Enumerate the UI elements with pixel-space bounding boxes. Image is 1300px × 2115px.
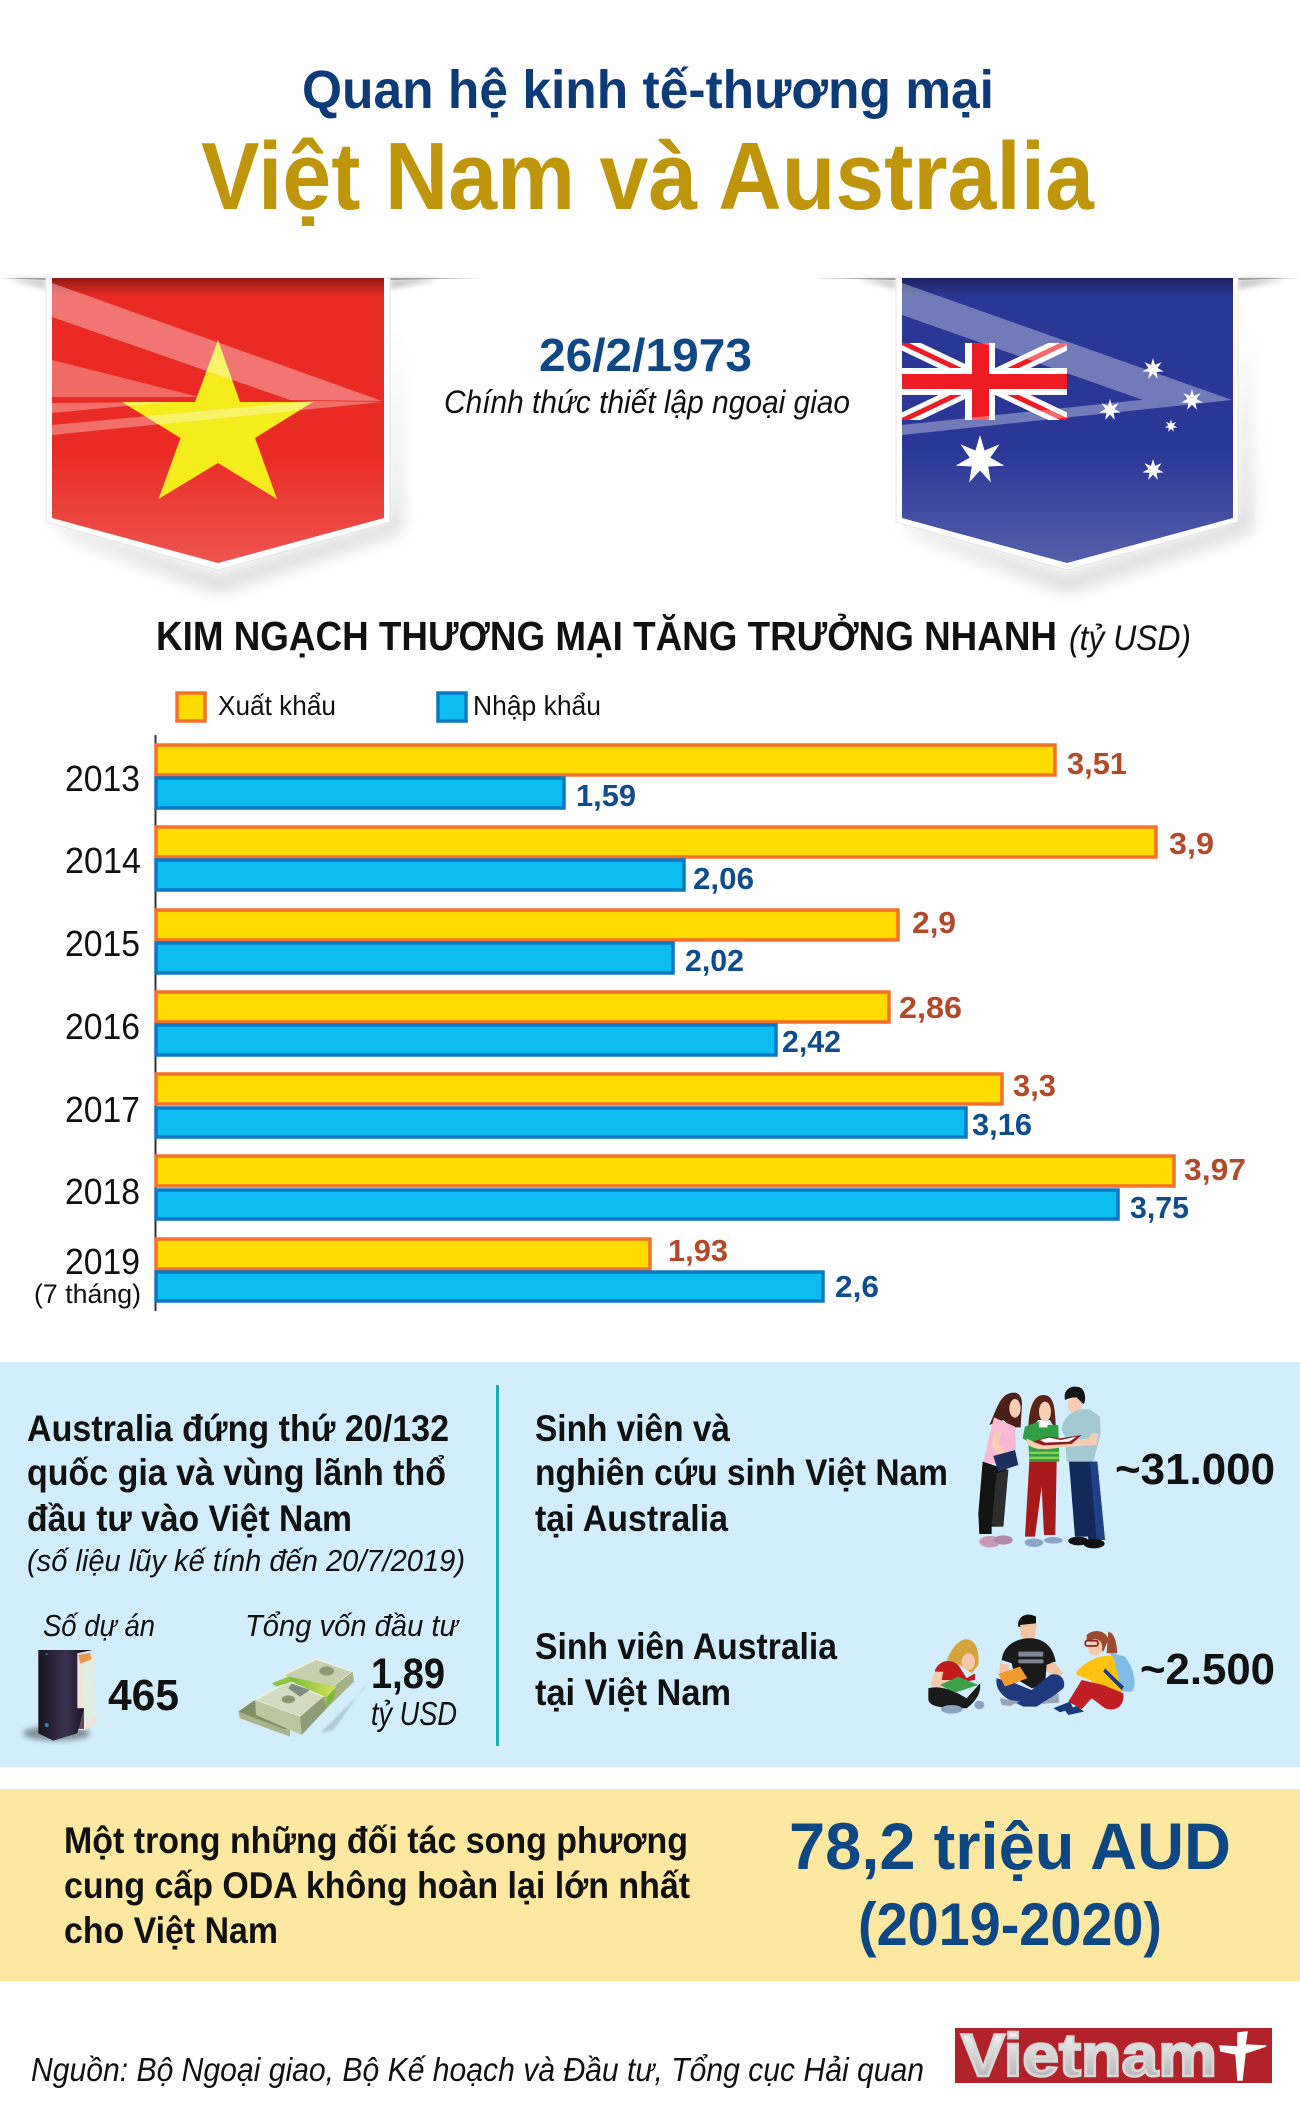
bars 2013: 1,59 xyxy=(576,778,636,813)
date callout xyxy=(444,329,850,420)
bars 2016: 2,42 xyxy=(782,1024,841,1059)
legend: Nhập khẩu xyxy=(473,690,601,721)
chart heading: KIM NGẠCH THƯƠNG MẠI TĂNG TRƯỞNG NHANH xyxy=(156,613,1057,659)
title: Quan hệ kinh tế-thương mại xyxy=(302,60,994,120)
icon: server with folders xyxy=(23,1650,97,1741)
title: Việt Nam và Australia xyxy=(201,123,1095,230)
stat: total capital: tỷ USD xyxy=(371,1695,457,1732)
bars 2014 xyxy=(65,826,1214,896)
student text: Vietnamese students: Sinh viên và xyxy=(535,1408,730,1449)
student text: Vietnamese students: nghiên cứu sinh Việt Nam xyxy=(535,1452,948,1493)
panel: investment and students xyxy=(0,1362,1300,1767)
bars 2013: 3,51 xyxy=(1067,746,1127,781)
bars 2014: 3,9 xyxy=(1169,826,1214,861)
investment text: đầu tư vào Việt Nam xyxy=(27,1498,352,1539)
stat: number of projects: Số dự án xyxy=(43,1608,155,1643)
student text: Australian students: Sinh viên Australia xyxy=(535,1626,837,1667)
student text: Australian students: ~2.500 xyxy=(1140,1645,1275,1694)
bars 2019: (7 tháng) xyxy=(34,1279,141,1309)
student text: Australian students: tại Việt Nam xyxy=(535,1672,731,1713)
bars 2018 xyxy=(65,1152,1246,1225)
date callout: 26/2/1973 xyxy=(539,329,752,381)
investment text xyxy=(27,1408,465,1578)
chart heading: (tỷ USD) xyxy=(1069,619,1191,658)
icon: three standing students xyxy=(978,1387,1105,1548)
stat: number of projects: 465 xyxy=(108,1671,179,1720)
flag ribbon: Vietnam xyxy=(0,278,480,590)
bars 2015 xyxy=(65,905,956,978)
panel: ODA: Một trong những đối tác song phương xyxy=(64,1820,688,1861)
bars 2017: 2017 xyxy=(65,1089,140,1130)
stat: number of projects xyxy=(23,1608,179,1741)
bars 2016: 2016 xyxy=(65,1006,140,1047)
bars 2013 xyxy=(65,745,1127,813)
bars 2015: 2,02 xyxy=(685,943,744,978)
bars 2017: 3,3 xyxy=(1013,1068,1056,1103)
logo: Vietnam+: Vietnam xyxy=(961,2022,1217,2089)
bars 2019: 1,93 xyxy=(668,1233,728,1268)
bars 2013: 2013 xyxy=(65,758,140,799)
student text: Australian students xyxy=(535,1626,1275,1713)
bars 2019: 2019 xyxy=(65,1241,140,1282)
stat: total capital: 1,89 xyxy=(371,1650,445,1698)
bars 2014: 2,06 xyxy=(693,861,754,896)
stat: total capital xyxy=(238,1608,460,1737)
icon: stack of money xyxy=(238,1659,367,1737)
source: Nguồn: Bộ Ngoại giao, Bộ Kế hoạch và Đầu tư, Tổng cục Hải quan xyxy=(31,2051,924,2088)
investment text: Australia đứng thứ 20/132 xyxy=(27,1408,449,1449)
bars 2018: 3,75 xyxy=(1130,1190,1189,1225)
icon: three sitting students xyxy=(928,1615,1135,1715)
bars 2015: 2015 xyxy=(65,923,140,964)
bar chart xyxy=(34,735,1246,1311)
bars 2017 xyxy=(65,1068,1056,1142)
panel: ODA: 78,2 triệu AUD xyxy=(789,1809,1231,1883)
title xyxy=(201,60,1095,230)
panel: ODA: cho Việt Nam xyxy=(64,1910,278,1951)
bars 2019 xyxy=(34,1233,879,1309)
student text: Vietnamese students: tại Australia xyxy=(535,1498,728,1539)
panel: ODA: cung cấp ODA không hoàn lại lớn nhất xyxy=(64,1865,690,1906)
legend: Xuất khẩu xyxy=(218,690,336,721)
bars 2016 xyxy=(65,990,962,1059)
panel: ODA: (2019-2020) xyxy=(858,1891,1162,1958)
investment text: (số liệu lũy kế tính đến 20/7/2019) xyxy=(27,1543,465,1578)
date callout: Chính thức thiết lập ngoại giao xyxy=(444,384,850,420)
flag ribbon: Australia xyxy=(815,278,1300,590)
panel: ODA xyxy=(0,1789,1300,1981)
bars 2018: 3,97 xyxy=(1184,1152,1246,1187)
bars 2014: 2014 xyxy=(65,840,141,881)
student text: Vietnamese students: ~31.000 xyxy=(1115,1445,1275,1494)
bars 2019: 2,6 xyxy=(835,1269,879,1304)
bars 2015: 2,9 xyxy=(912,905,956,940)
bars 2017: 3,16 xyxy=(972,1107,1032,1142)
bars 2018: 2018 xyxy=(65,1171,140,1212)
student text: Vietnamese students xyxy=(535,1408,1275,1539)
bars 2016: 2,86 xyxy=(899,990,962,1025)
stat: total capital: Tổng vốn đầu tư xyxy=(245,1608,460,1643)
legend xyxy=(177,690,601,721)
investment text: quốc gia và vùng lãnh thổ xyxy=(27,1452,446,1493)
